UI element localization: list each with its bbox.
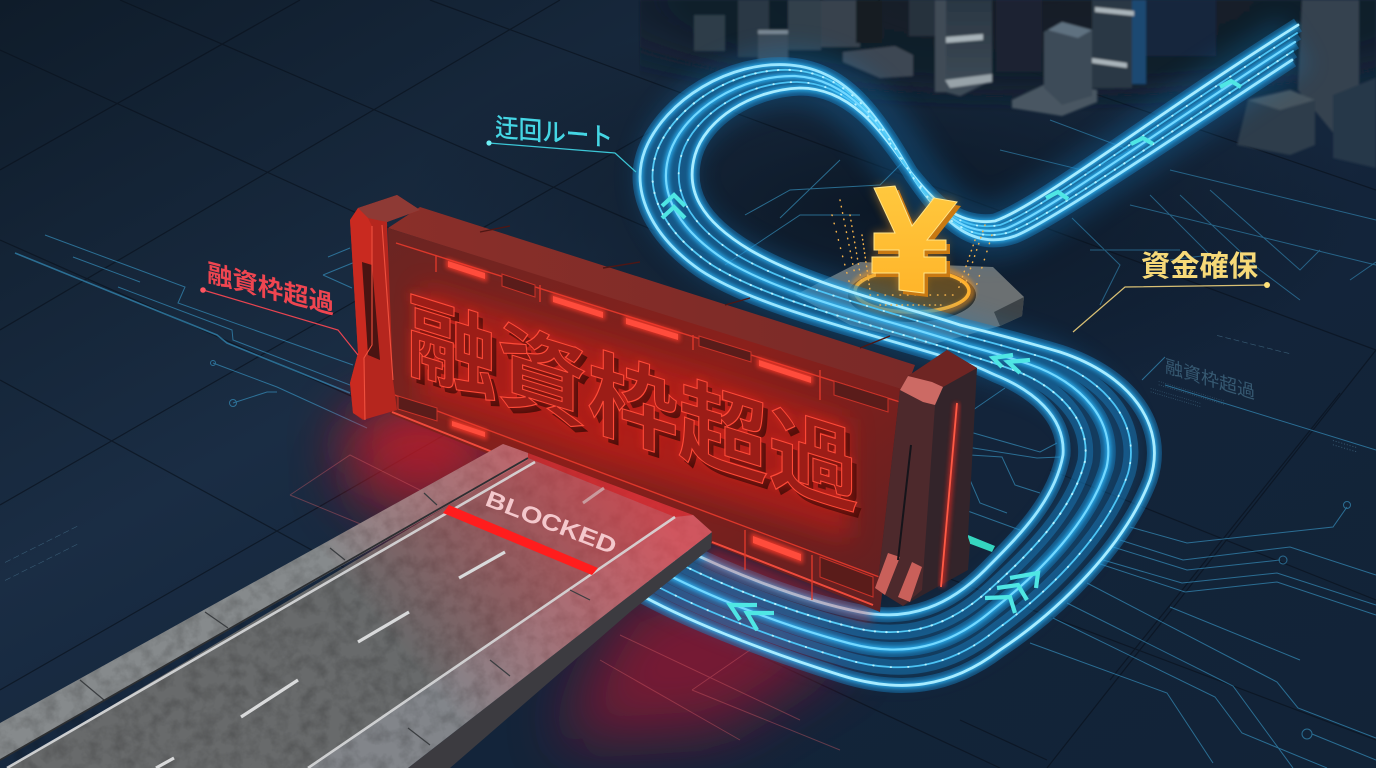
tower with base: [1012, 0, 1216, 116]
label: funds secured: [1073, 250, 1270, 332]
curb joints: [80, 493, 590, 745]
wall headline glow: 融資枠超過: [406, 284, 859, 527]
faint hologram text on floor: :::::::::: [1332, 437, 1357, 455]
glowing blue detour route: [632, 25, 1298, 685]
gold particles: [832, 200, 992, 305]
wall top seams: [480, 226, 890, 348]
faint hologram text on floor: [5, 330, 1357, 586]
road label: BLOCKED: [482, 485, 620, 559]
upper right traces: [1000, 120, 1376, 305]
route ribbon: [632, 25, 1298, 685]
floor glow under wall: [700, 545, 873, 625]
left traces: [15, 235, 367, 428]
red barrier wall: [350, 195, 977, 612]
coin platform: [795, 262, 1024, 345]
dark slots: [398, 274, 888, 597]
label: credit limit exceeded: [200, 259, 358, 355]
route sparkle dots: [644, 33, 1297, 667]
road side face: [408, 532, 712, 768]
faint hologram text on floor: – – – – – – – – –: [5, 538, 77, 586]
red stop line: [443, 505, 598, 575]
city skyline: [640, 0, 1376, 168]
concrete road: [0, 440, 720, 768]
wall headline shadow: 融資枠超過: [411, 290, 864, 533]
city shadow backdrop: [640, 0, 1376, 150]
label: credit limit exceeded: 融資枠超過: [207, 259, 334, 320]
groove along left curb: [0, 458, 528, 760]
faint hologram text on floor: – – – – – – – – –: [1217, 330, 1290, 359]
wall panel lines: [392, 243, 900, 605]
right foreground towers: [1237, 0, 1376, 168]
right traces: [1030, 357, 1376, 768]
faint hologram text on floor: – – – – – – – – –: [5, 520, 77, 568]
wall top surface: [388, 207, 915, 392]
left post: [350, 195, 420, 420]
route bright strands: [632, 25, 1298, 685]
faint hologram text on floor: :::::::::::::::::::::::: [1150, 385, 1201, 409]
arrow: chevrons on route: [662, 81, 1241, 630]
teal bar behind post: [968, 535, 995, 552]
label: detour route: 迂回ルート: [495, 114, 613, 153]
label: detour route: [486, 114, 636, 172]
wall front face: [388, 228, 905, 612]
towers row back: [694, 0, 1042, 96]
right curb: [308, 515, 712, 768]
lit slots: [446, 258, 813, 564]
faint hologram text on floor: ::::::::::::::::::::::::::::::: [1158, 378, 1225, 407]
road surface: [7, 458, 675, 768]
red light on road: [0, 444, 712, 768]
yen symbol: [832, 186, 992, 305]
road markings: [7, 462, 675, 768]
right post: [875, 350, 977, 606]
label: funds secured: 資金確保: [1141, 250, 1258, 283]
lit slots core: [448, 261, 811, 561]
red floor glow: [290, 405, 850, 750]
yen glow: [872, 186, 957, 293]
inner loop traces: [725, 160, 1060, 530]
route strand blur: [632, 25, 1298, 685]
route glow: [657, 42, 1295, 650]
faint hologram text on floor: 融資枠超過: [1165, 355, 1255, 403]
wall headline: 融資枠超過: [406, 284, 859, 527]
yen face: [872, 186, 957, 293]
concrete texture: [0, 451, 636, 768]
yen extrusion: [876, 190, 961, 297]
wall inner glow: [420, 285, 850, 540]
left curb: [0, 444, 528, 760]
